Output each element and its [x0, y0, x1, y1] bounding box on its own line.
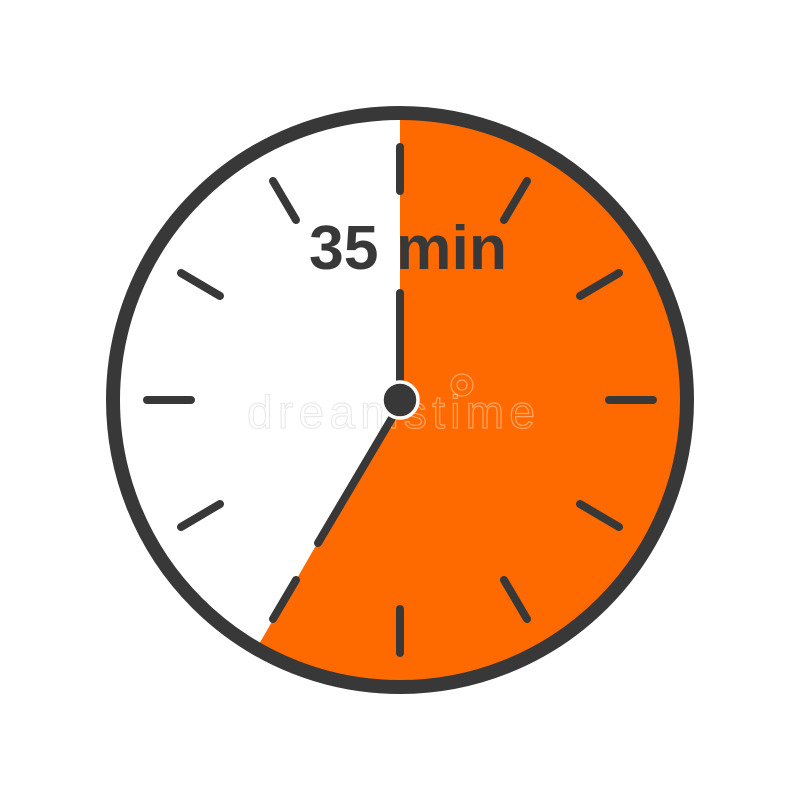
timer infographic [106, 106, 694, 694]
clock face [113, 113, 687, 687]
orange 35 minute sector [256, 113, 687, 687]
watermark: dreamstime [247, 386, 535, 438]
hour tick marks [147, 147, 653, 653]
watermark: dreamstime [247, 386, 535, 438]
duration label: 35 min [309, 213, 507, 283]
watermark [248, 373, 534, 430]
center hub [382, 382, 418, 418]
clock outer ring [113, 113, 687, 687]
clock hands [318, 293, 400, 543]
